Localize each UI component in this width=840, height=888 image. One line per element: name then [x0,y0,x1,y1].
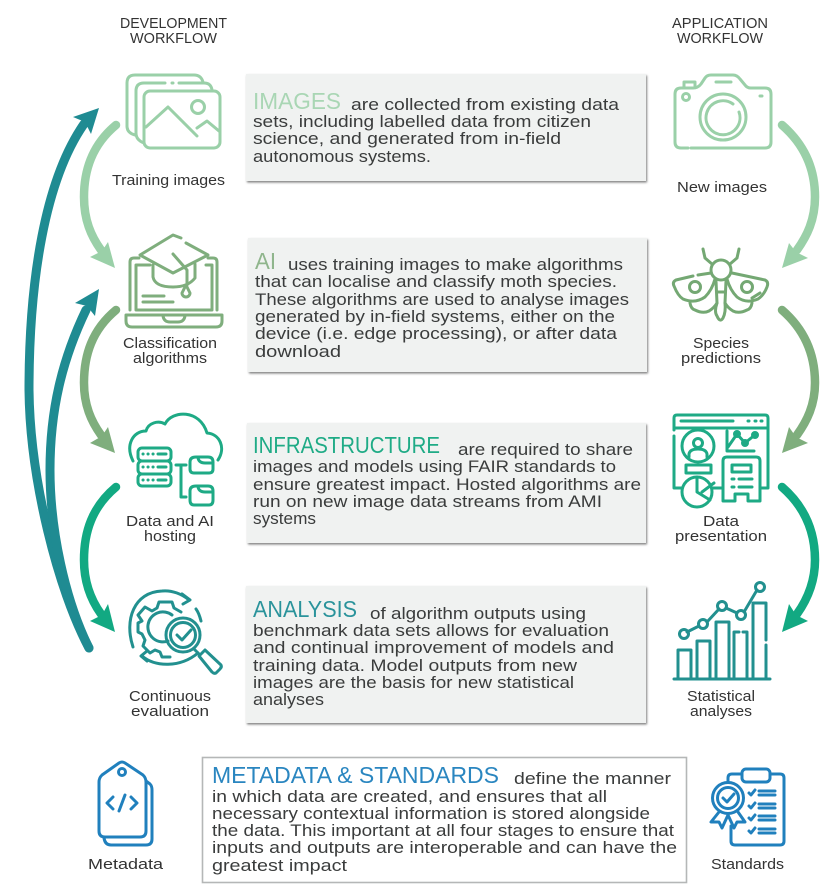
panel text: AI: download [255,342,341,361]
panel text: analysis [253,604,614,709]
panel text: infrastructure: images and models using FAIR standards to [253,457,616,476]
panel text: images [253,95,620,166]
heading: development workflow: WORKFLOW [130,30,218,47]
arrow: data presentation to statistical analyses [782,487,815,632]
panel text: metadata and standards: greatest impact [212,856,347,875]
panel text: metadata and standards: the data. This important at all four stages to ensure that [212,821,674,840]
label: continuous evaluation: Continuous [129,688,211,705]
label: statistical analyses: analyses [690,703,752,720]
panel text: infrastructure: systems [253,509,316,528]
panel text: analysis: and continual improvement of models and [253,638,614,657]
icon: statistical analyses chart [674,582,770,679]
panel text: analysis: of algorithm outputs using [370,604,586,623]
panel heading: AI: AI [255,248,276,274]
panel text: metadata and standards [212,769,677,875]
icon: classification algorithms [126,235,222,327]
label: data presentation: presentation [675,528,767,545]
heading: application workflow: WORKFLOW [677,30,764,47]
heading: application workflow [672,15,768,47]
panel text: metadata and standards: in which data are created, and ensures that all [212,787,607,806]
panel text: AI: uses training images to make algorithms [288,255,623,274]
panel text: images: science, and generated from in-field [253,129,561,148]
panel heading: images: IMAGES [253,88,341,114]
label: continuous evaluation [129,688,211,720]
arrow: training images to classification [84,125,116,268]
label: data presentation [675,513,767,545]
panel heading: metadata and standards: METADATA & STANDARDS [212,762,499,788]
panel text: analysis: images are the basis for new statistical [253,673,574,692]
label: new images: New images [677,179,767,196]
arrow: new images to species predictions [782,125,815,268]
panel: infrastructure [247,423,646,543]
label: standards: Standards [711,856,784,873]
arrow: evaluation to classification [50,289,99,648]
icon: continuous evaluation [130,591,221,673]
panel text: infrastructure: are required to share [458,440,633,459]
icon: data presentation [674,415,768,507]
label: species predictions [681,335,761,367]
label: data and AI hosting: hosting [144,528,196,545]
heading: application workflow: APPLICATION [672,15,768,32]
label: metadata: Metadata [88,856,164,873]
icon: data and AI hosting [130,414,222,505]
label: data and AI hosting: Data and AI [126,513,214,530]
panel text: analysis: benchmark data sets allows for evaluation [253,621,609,640]
panel text: AI: generated by in-field systems, either on the [255,307,615,326]
panel text: images: sets, including labelled data from citizen [253,112,591,131]
panel text: images: autonomous systems. [253,147,431,166]
arrow: evaluation to training images [29,108,99,648]
panel text: AI: device (i.e. edge processing), or after data [255,324,618,343]
label: data and AI hosting [126,513,214,545]
panel text: infrastructure: run on new image data streams from AMI [253,492,602,511]
panel text: AI: that can localise and classify moth species. [255,272,617,291]
icon: metadata tag [99,762,152,845]
label: training images: Training images [112,172,225,189]
label: classification algorithms: algorithms [133,350,207,367]
panel text: metadata and standards: define the manner [514,769,671,788]
panel text: infrastructure: ensure greatest impact. Hosted algorithms are [253,475,641,494]
label: classification algorithms: Classification [123,335,217,352]
label: data presentation: Data [703,513,740,530]
panel text: analysis: analyses [253,690,324,709]
panel text: metadata and standards: necessary contextual information is stored alongside [212,804,650,823]
panel: analysis [246,586,646,723]
label: classification algorithms [123,335,217,367]
panel text: infrastructure [253,440,641,528]
panel text: analysis: training data. Model outputs from new [253,656,578,675]
icon: camera [675,75,771,148]
panel heading: infrastructure: INFRASTRUCTURE [253,432,440,458]
icon: training images [127,75,220,148]
heading: development workflow: DEVELOPMENT [120,15,227,32]
icon: moth [673,249,768,320]
label: species predictions: predictions [681,350,761,367]
panel text: metadata and standards: inputs and outputs are interoperable and can have the [212,838,677,857]
icon: standards clipboard and medal [711,769,784,845]
panel text: AI: These algorithms are used to analyse images [255,290,629,309]
panel text: AI [255,255,629,361]
arrow: species predictions to data presentation [782,310,815,453]
panel: images [246,74,646,181]
label: statistical analyses: Statistical [687,688,755,705]
heading: development workflow [120,15,227,47]
panel: metadata and standards [202,758,686,882]
arrow: hosting to evaluation [84,487,116,632]
panel text: images: are collected from existing data [351,95,620,114]
label: species predictions: Species [693,335,749,352]
panel heading: analysis: ANALYSIS [253,596,357,622]
label: statistical analyses [687,688,755,720]
label: continuous evaluation: evaluation [131,703,209,720]
panel: AI [248,238,647,372]
arrow: classification to hosting [84,310,116,453]
